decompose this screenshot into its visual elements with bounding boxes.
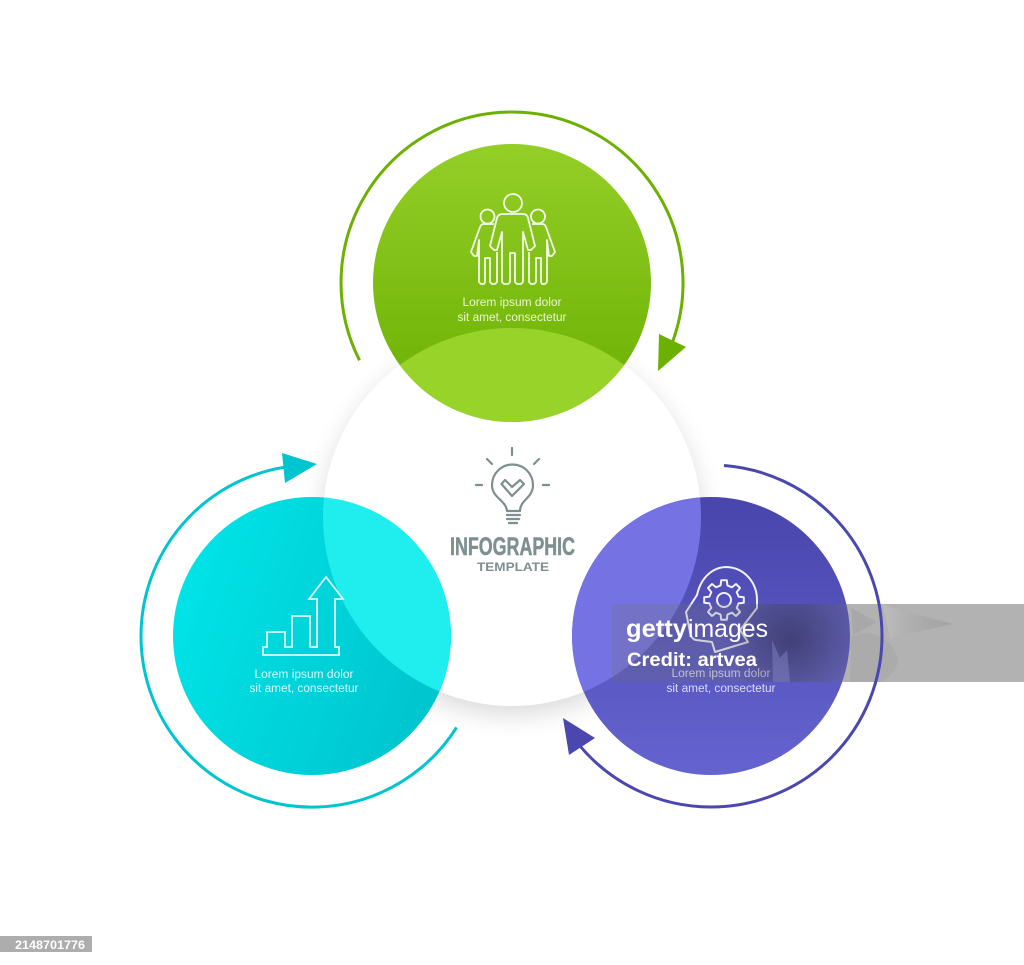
text: cyan circle [250, 669, 359, 695]
watermark text: images [688, 615, 768, 643]
image id tag: 2148701776 [15, 940, 85, 952]
icon: people [471, 194, 555, 284]
text: purple circle: Lorem ipsum dolor [672, 668, 771, 680]
icon: head with gear [686, 567, 757, 652]
text: purple circle: sit amet, consectetur [666, 683, 776, 695]
heading: infographic: INFOGRAPHIC [450, 533, 575, 561]
watermark text: getty [626, 615, 687, 643]
watermark text: Credit: artvea [627, 650, 757, 671]
text: green circle [458, 297, 567, 324]
arrow: green [341, 112, 686, 371]
panel: purple circle [572, 497, 850, 775]
icon: growth chart [263, 577, 343, 655]
watermark text [626, 615, 768, 671]
text: green circle: Lorem ipsum dolor [462, 297, 562, 309]
text: cyan circle: sit amet, consectetur [250, 683, 359, 695]
panel: cyan circle [173, 497, 451, 775]
heading: template: TEMPLATE [477, 562, 549, 574]
text: purple circle [666, 668, 776, 695]
panel: green circle [373, 144, 651, 422]
text: cyan circle: Lorem ipsum dolor [254, 669, 354, 681]
arrow: purple [563, 466, 882, 807]
image id tag [0, 936, 92, 952]
text: green circle: sit amet, consectetur [458, 312, 567, 324]
arrow: cyan [141, 453, 457, 807]
icon: lightbulb [476, 448, 549, 523]
panel: centre circle [323, 328, 701, 713]
watermark band [612, 604, 1024, 682]
